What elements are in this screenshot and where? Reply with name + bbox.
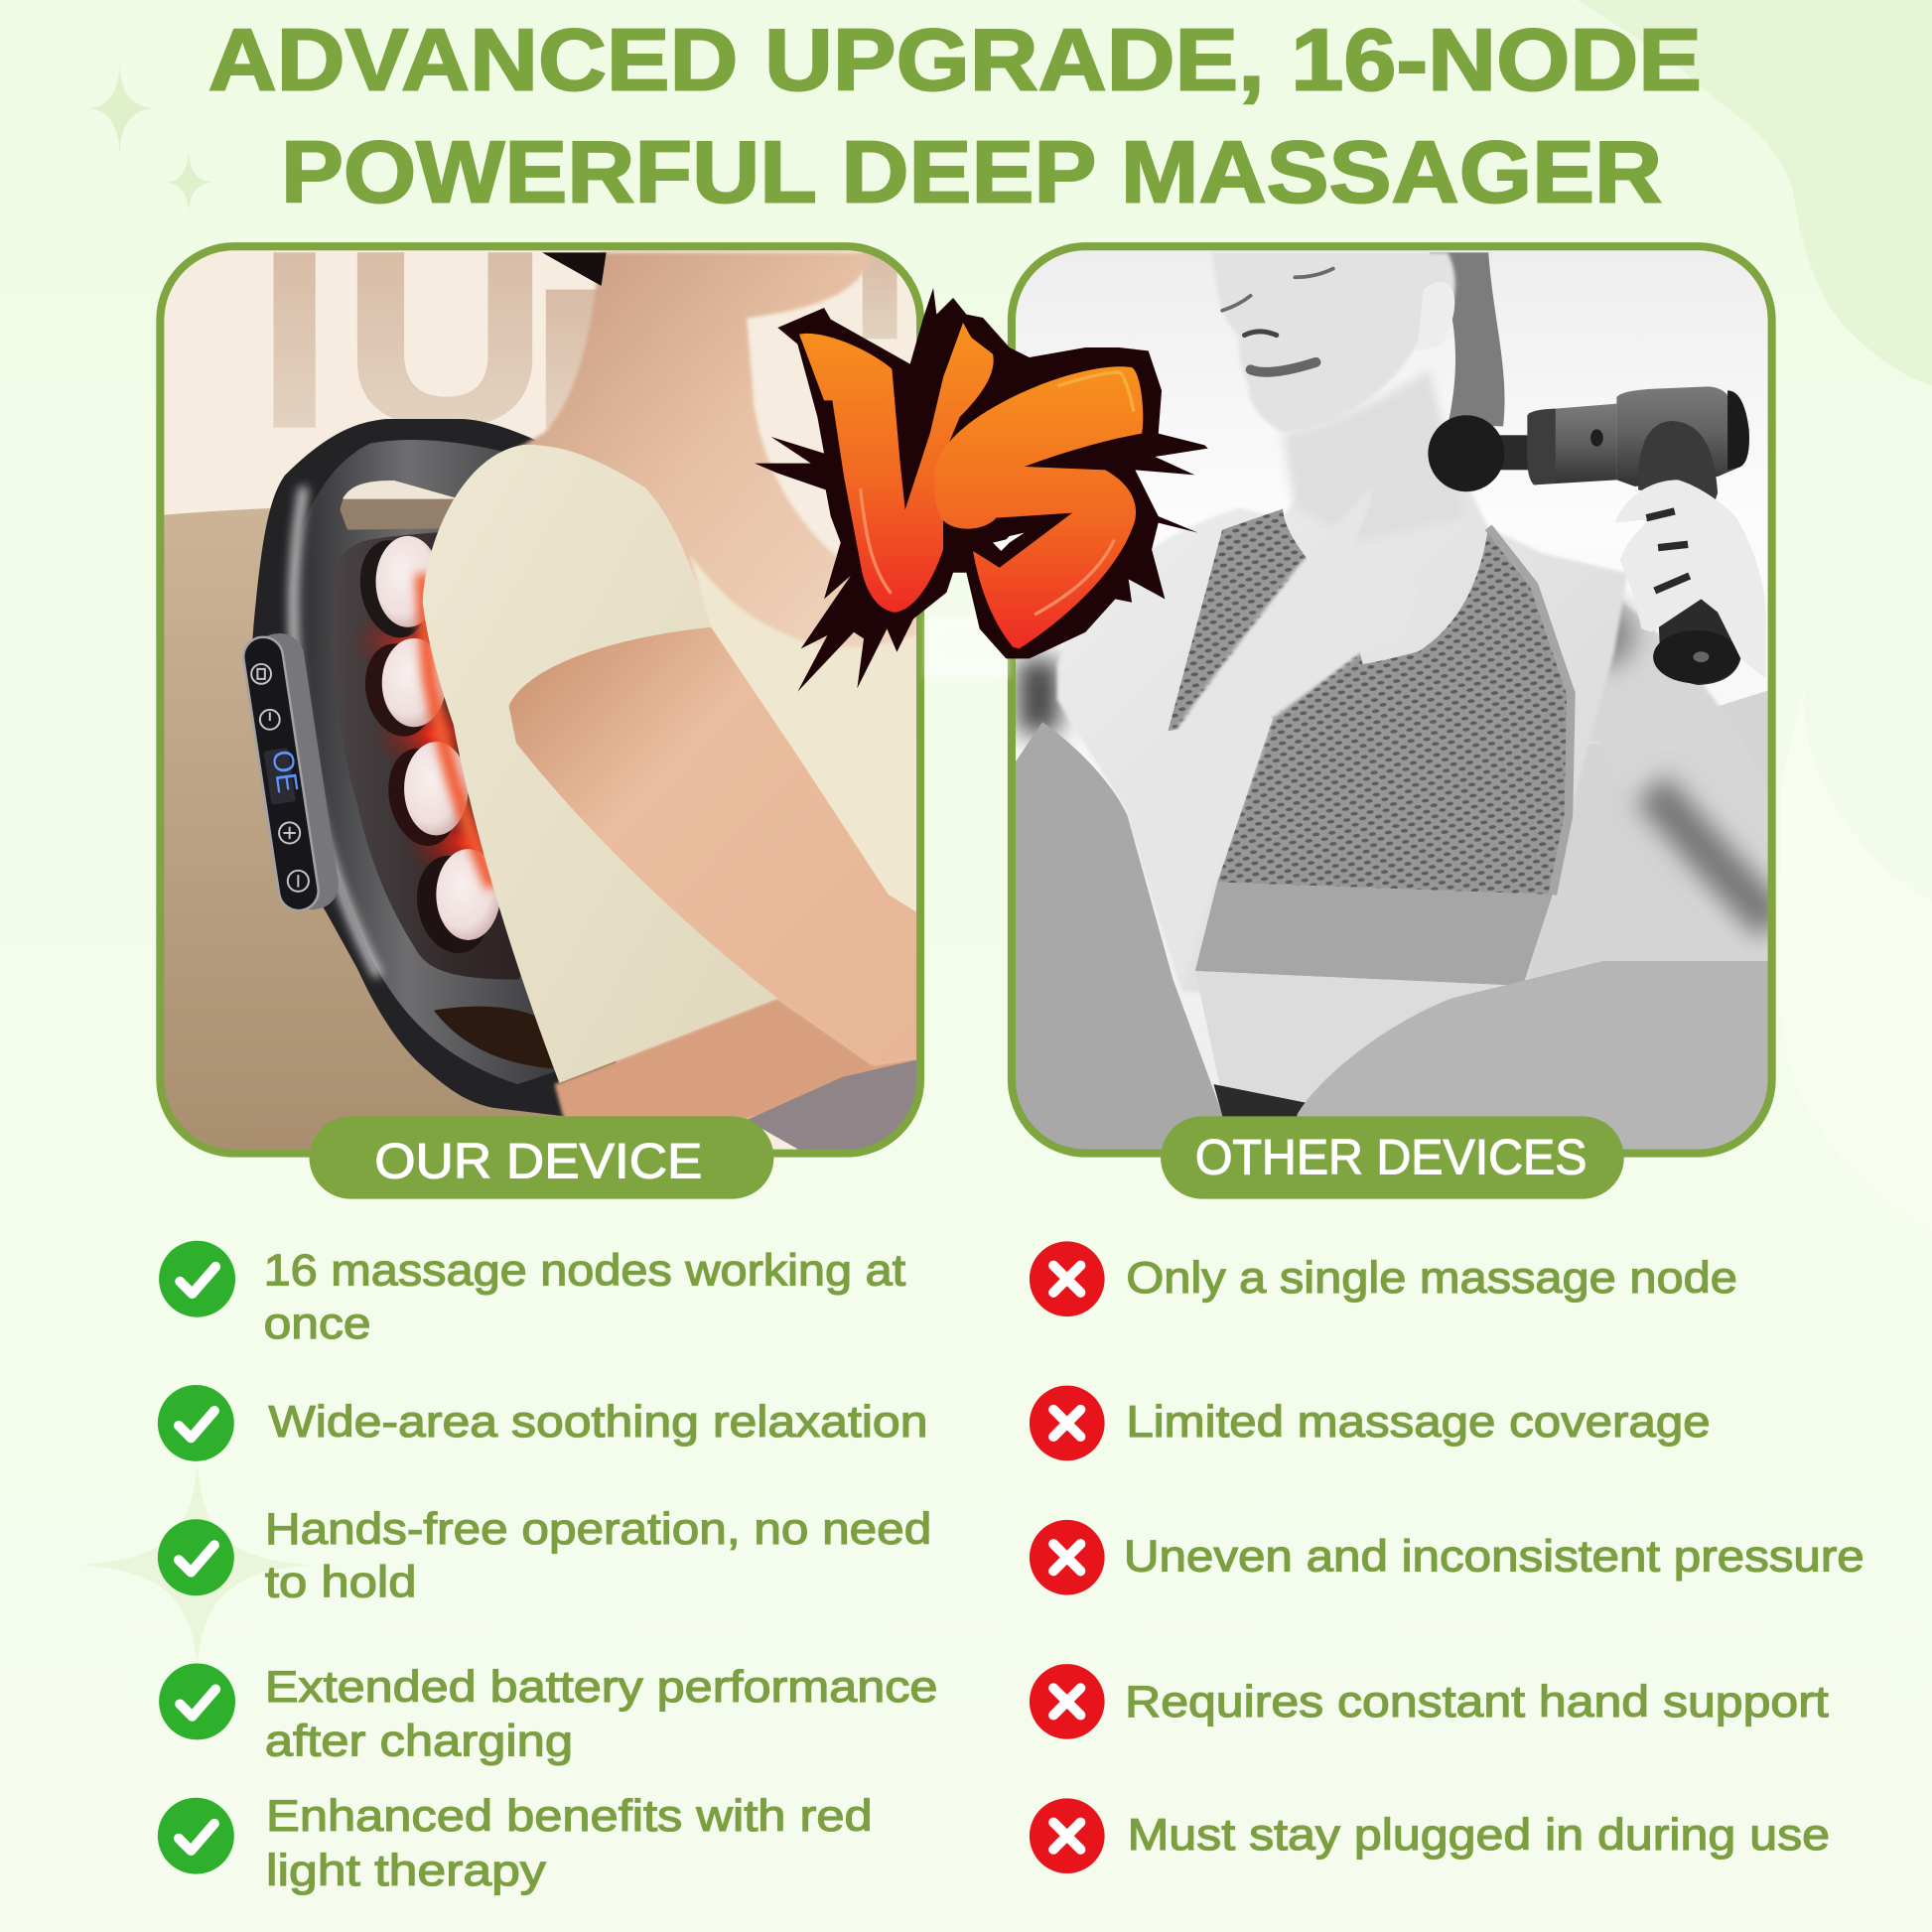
red edge light xyxy=(423,574,492,888)
item 2 xyxy=(1030,1386,1711,1460)
decorative sparkle large xyxy=(86,62,157,158)
item 4 xyxy=(159,1663,937,1766)
hair xyxy=(542,252,607,286)
device body xyxy=(252,419,617,1116)
title: ADVANCED UPGRADE, 16-NODE xyxy=(208,11,1702,109)
massage nodes xyxy=(351,534,500,960)
item 5: Must stay plugged in during use xyxy=(1128,1811,1830,1860)
top band xyxy=(1195,883,1553,986)
shadow behind pillow xyxy=(1018,659,1059,733)
title: POWERFUL DEEP MASSAGER xyxy=(281,123,1662,221)
right hand xyxy=(1615,480,1765,678)
massage gun head xyxy=(1428,415,1504,491)
decorative top-right blob xyxy=(1578,0,1932,385)
arm xyxy=(509,627,918,1064)
decorative right-side blob xyxy=(1780,669,1932,1232)
mesh top xyxy=(1169,509,1571,895)
decorative sparkle faded xyxy=(80,1463,311,1666)
red glow xyxy=(355,619,484,869)
neck shade xyxy=(1282,371,1445,522)
item 5: light therapy xyxy=(266,1847,547,1895)
item 1: Only a single massage node xyxy=(1126,1254,1737,1303)
label: our device xyxy=(310,1116,773,1199)
letter V xyxy=(799,323,994,613)
letter S xyxy=(934,366,1143,648)
decorative sparkle small xyxy=(164,148,215,215)
wall lettering xyxy=(274,252,897,428)
list: our device xyxy=(158,1241,937,1895)
control panel: OE xyxy=(265,748,304,795)
face xyxy=(1212,252,1455,433)
massage gun xyxy=(1489,386,1749,685)
hair braid xyxy=(1430,252,1505,426)
item 3: Hands-free operation, no need xyxy=(265,1505,931,1554)
bottom pillow xyxy=(1288,961,1769,1151)
item 2: Limited massage coverage xyxy=(1126,1398,1711,1447)
shoulder shade xyxy=(1581,603,1635,666)
arm shade xyxy=(1651,788,1774,924)
right arm xyxy=(1588,603,1720,745)
item 4: after charging xyxy=(265,1718,573,1766)
ink splash xyxy=(755,288,1208,692)
top strap edge xyxy=(1488,527,1571,895)
item 3 xyxy=(1030,1520,1864,1595)
title xyxy=(208,11,1702,221)
item 3: to hold xyxy=(265,1558,416,1606)
dark waistband xyxy=(1213,1084,1305,1116)
control panel xyxy=(241,630,342,913)
white patch behind emblem xyxy=(926,617,1008,678)
trousers xyxy=(747,1059,918,1151)
item 1: 16 massage nodes working at xyxy=(264,1246,906,1295)
VS emblem xyxy=(755,288,1208,692)
waist xyxy=(554,998,918,1121)
item 1 xyxy=(1030,1241,1737,1316)
panel: our device xyxy=(160,246,920,1154)
item 4: Requires constant hand support xyxy=(1125,1678,1829,1726)
panel: other devices xyxy=(1012,246,1774,1154)
item 4: Extended battery performance xyxy=(265,1663,937,1712)
item 5: Enhanced benefits with red xyxy=(266,1792,873,1841)
left pillow xyxy=(1014,722,1235,1151)
belly xyxy=(1199,971,1501,1102)
letter highlights xyxy=(861,372,1134,614)
item 5 xyxy=(158,1792,873,1895)
label: other devices: OTHER DEVICES xyxy=(1195,1130,1587,1185)
shirt xyxy=(423,445,777,1083)
shirt right side xyxy=(690,554,918,936)
item 2 xyxy=(158,1385,928,1461)
grey wall xyxy=(1522,690,1769,986)
item 1 xyxy=(159,1241,906,1348)
chest and neck xyxy=(515,250,916,649)
list: other devices xyxy=(1030,1241,1864,1873)
item 1: once xyxy=(264,1300,371,1348)
label: other devices xyxy=(1161,1116,1624,1199)
facial features xyxy=(1222,269,1333,372)
item 2: Wide-area soothing relaxation xyxy=(269,1398,928,1447)
raised forearm and hand xyxy=(1173,556,1360,868)
torso skin xyxy=(1054,490,1627,993)
label: our device: OUR DEVICE xyxy=(374,1133,702,1188)
item 3 xyxy=(158,1505,931,1606)
item 4 xyxy=(1030,1664,1829,1739)
item 5 xyxy=(1030,1798,1830,1873)
tan lower wall xyxy=(164,508,564,1150)
item 3: Uneven and inconsistent pressure xyxy=(1124,1532,1864,1581)
